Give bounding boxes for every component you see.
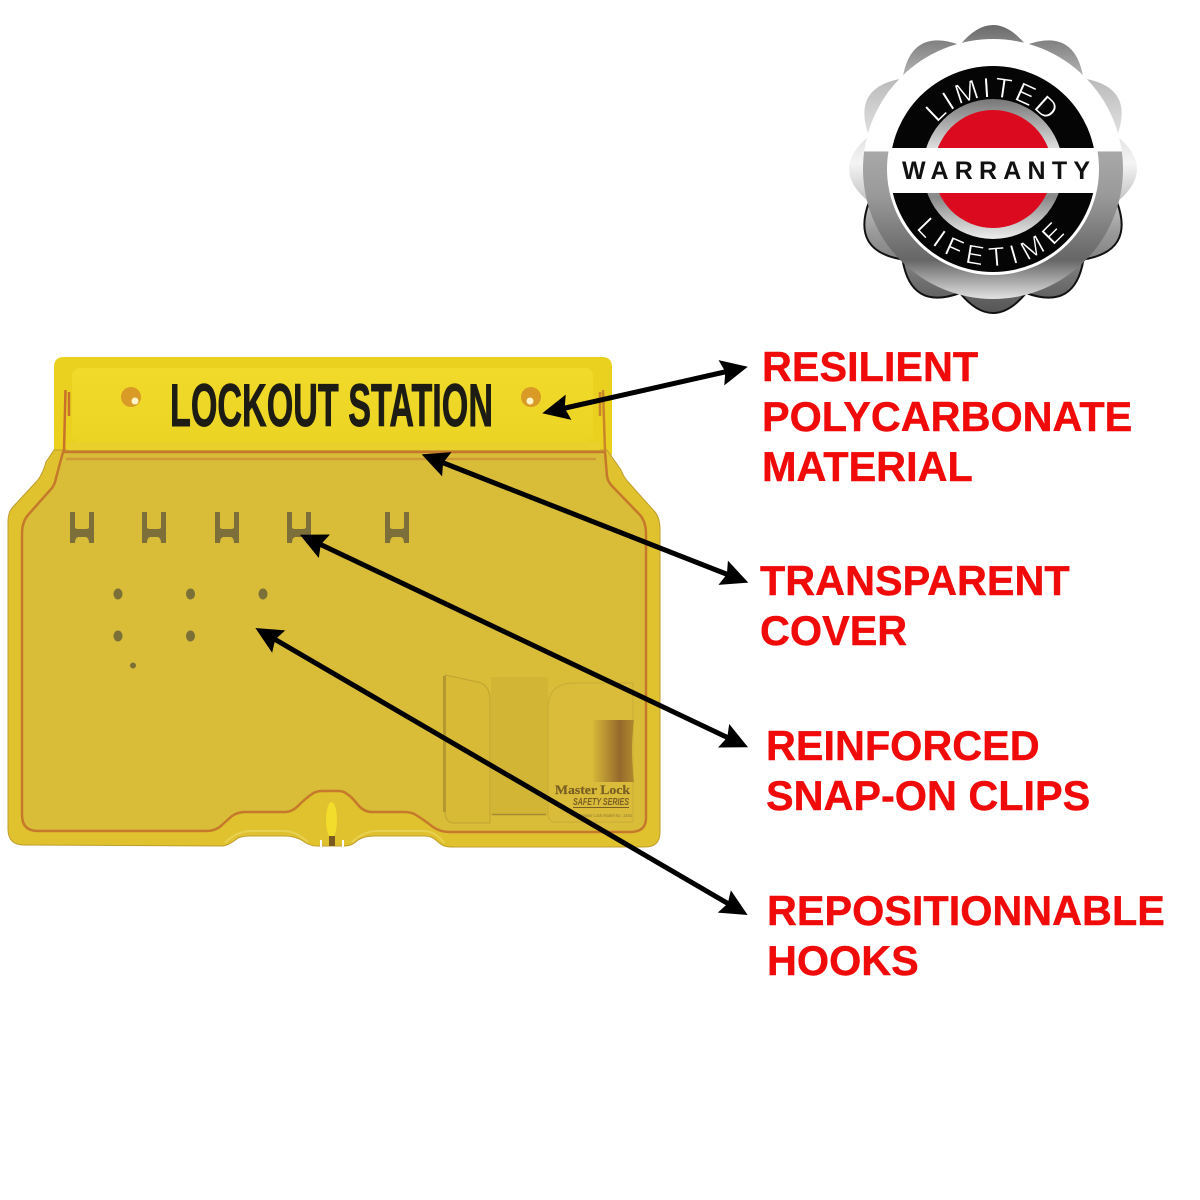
label: resilient polycarbonate material: MATERIAL bbox=[762, 444, 973, 490]
screw left bbox=[121, 387, 141, 407]
pocket window bbox=[593, 720, 634, 782]
badge lower outline bbox=[864, 202, 1122, 313]
warranty badge bbox=[849, 25, 1137, 314]
hook slot 4 bbox=[287, 512, 311, 543]
second hinge line bbox=[66, 458, 596, 460]
label: reinforced snap-on clips: SNAP-ON CLIPS bbox=[766, 773, 1090, 819]
recess bottom line bbox=[492, 814, 546, 816]
hook slot 2 bbox=[142, 512, 166, 543]
centre recess bbox=[491, 677, 548, 815]
brand: master lock: Master Lock bbox=[555, 782, 631, 797]
right hinge strip bbox=[600, 390, 605, 451]
left hinge strip bbox=[64, 390, 69, 451]
label: repositionnable hooks: REPOSITIONNABLE bbox=[767, 888, 1165, 934]
word: lifetime: LIFETIME bbox=[918, 218, 1064, 266]
cover inner panel and red edge line bbox=[22, 452, 646, 832]
left pocket edge bbox=[443, 676, 446, 812]
brand underline bbox=[573, 806, 629, 808]
word: limited: LIMITED bbox=[925, 77, 1056, 122]
badge scalloped edge bbox=[849, 25, 1137, 313]
peg holes bbox=[114, 588, 268, 668]
hook slot 3 bbox=[215, 512, 239, 543]
arrow: polycarbonate material bbox=[552, 369, 738, 411]
notch highlight right bbox=[352, 831, 444, 843]
arrow: repositionable hooks bbox=[264, 633, 739, 910]
brand: safety series: SAFETY SERIES bbox=[573, 797, 629, 808]
badge silver ring bbox=[923, 99, 1063, 239]
screw right bbox=[521, 387, 541, 407]
label: transparent cover: TRANSPARENT bbox=[760, 558, 1070, 604]
latch pin bbox=[320, 802, 344, 847]
brand: model number: Master Lock Model No. 1482 bbox=[580, 813, 632, 818]
label: reinforced snap-on clips: REINFORCED bbox=[766, 723, 1040, 769]
hook slot 5 bbox=[385, 512, 409, 543]
badge red centre bbox=[934, 110, 1052, 228]
left pocket bbox=[445, 675, 490, 823]
label: resilient polycarbonate material: RESILIENT bbox=[762, 344, 978, 390]
header plate back bbox=[54, 357, 612, 455]
label: repositionnable hooks: HOOKS bbox=[767, 938, 919, 984]
badge white inner line bbox=[887, 63, 1099, 275]
label: transparent cover: COVER bbox=[760, 608, 907, 654]
lockout station board bbox=[8, 357, 660, 847]
badge white and silver ring bbox=[863, 39, 1123, 299]
header label plate bbox=[72, 368, 593, 442]
transparent cover body bbox=[8, 450, 660, 847]
badge white band bbox=[890, 148, 1096, 193]
right pocket bbox=[548, 683, 633, 822]
notch highlight left bbox=[225, 831, 308, 843]
arrow: snap-on clips bbox=[309, 539, 739, 743]
header lower band bbox=[68, 442, 600, 450]
word: warranty: WARRANTY bbox=[902, 157, 1090, 185]
badge black ring bbox=[890, 66, 1096, 272]
arrow: transparent cover bbox=[431, 458, 739, 579]
title: lockout station: LOCKOUT STATION bbox=[170, 372, 493, 439]
hook slots bbox=[70, 512, 409, 543]
label: resilient polycarbonate material: POLYCARBONATE bbox=[762, 394, 1132, 440]
hook slot 1 bbox=[70, 512, 94, 543]
